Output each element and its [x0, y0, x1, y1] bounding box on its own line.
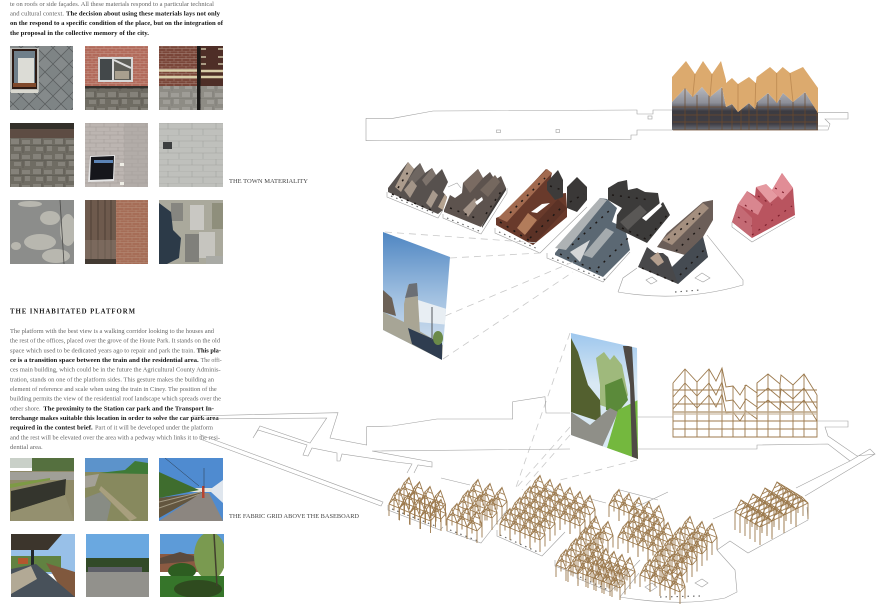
platform description text block: space which used to be dedicated years ago to repair and park the train. [10, 347, 195, 354]
platform description text block: building permits the view of the residential roof landscape which spreads over the [10, 396, 221, 403]
timber clad sawtooth roof [672, 61, 818, 113]
site outline: elevation strip [366, 110, 848, 141]
platform description text block: The proximity to the Station car park and the Transport In- [43, 405, 214, 412]
intro text block [10, 1, 224, 37]
timber frame block 4 [556, 516, 635, 600]
isometric coloured blocks [387, 162, 795, 296]
site outline: plan with platform [192, 397, 875, 602]
photo: station canopy and platform [11, 534, 75, 597]
block: dark front houses [638, 237, 708, 284]
timber frame block 1 [389, 478, 446, 533]
platform description text block: tration, stands on one of the platform sides. This gesture makes the building an [10, 376, 215, 383]
photo grid: platform site [10, 458, 226, 598]
block: blue-grey slate ring [555, 198, 630, 277]
photo: slate wall with window [10, 46, 73, 110]
timber frame block 2 [447, 480, 507, 543]
photo: lichen concrete [10, 200, 74, 264]
photo: station car park and train [86, 534, 149, 597]
photo: patched stone wall with shadow [159, 200, 223, 264]
heading: the inhabited platform: THE INHABITATED PLATFORM [10, 309, 136, 316]
photo: rough stone wall [10, 123, 74, 187]
plot baselines for the blocks [387, 183, 743, 296]
photo: brick wall with window [85, 46, 148, 110]
platform description text block: ce is a transition space between the train and the residential area. [10, 357, 199, 364]
photo: old retaining wall [10, 458, 74, 521]
photo: overgrown platform [85, 458, 148, 521]
block: dark grey houses [608, 180, 670, 243]
photo: green garden and houses [160, 534, 224, 597]
photo grid: town materials [10, 46, 223, 264]
photo: platform with tracks, blue sky [159, 458, 223, 521]
skewed photo: church tower [383, 232, 450, 360]
label: the town materiality: THE TOWN MATERIALITY [229, 178, 309, 185]
building elevation with timber roofs [672, 61, 818, 130]
skewed photo: river and trees [571, 333, 638, 459]
timber frame block 5 [609, 490, 673, 565]
platform description text block: terchange makes suitable this location in order to solve the car park area [10, 415, 219, 422]
photo: brick and stone with drainpipe [159, 46, 223, 110]
timber frame block 3 [500, 476, 595, 552]
intro text block: on the respond to a specific condition of the place, but on the integration of [10, 20, 224, 27]
block: small dark houses [547, 170, 587, 212]
block: grey and beige houses [388, 162, 448, 214]
photo: white painted brick wall [159, 123, 223, 187]
intro text block: te on roofs or side façades. All these materials respond to a particular technical [10, 1, 214, 8]
block: red model [732, 173, 795, 242]
platform description text block [10, 328, 222, 451]
block: beige-brown houses [657, 200, 713, 257]
photo: clad wall with dark window [85, 123, 148, 187]
platform description text block: dential area. [10, 444, 43, 451]
photo: timber door and brick [85, 200, 148, 264]
label: the fabric grid above the baseboard: THE FABRIC GRID ABOVE THE BASEBOARD [229, 513, 360, 520]
platform description text block: the rest of the offices, placed over the grove of the Houte Park. It stands on the old [10, 338, 221, 345]
elevation timber frame [673, 368, 817, 437]
intro text block: The decision about using these materials lays not only [66, 10, 221, 18]
timber elevation grid [672, 88, 818, 130]
dashed projection lines to river photo [515, 333, 637, 490]
intro text block: the proposal in the collective memory of the city. [10, 30, 149, 37]
platform description text block: required in the contest brief. [10, 425, 93, 432]
timber frame block 6 [640, 516, 717, 604]
platform description text block: The platform with the best view is a walking corridor looking to the houses and [10, 328, 215, 335]
platform description text block: ces main building, which could be in the future the Agricultural County Adminis- [10, 367, 221, 374]
platform description text block: and the rest will be elevated over the area with a pedway which links it to the resi- [10, 434, 220, 441]
timber frame block 7 [735, 482, 808, 545]
platform description text block: element of reference and scale when using the train in Ciney. The position of the [10, 386, 217, 393]
block: grey-brown houses [444, 169, 506, 228]
glazed storeys [672, 87, 818, 130]
intro text block: and cultural context. [10, 10, 64, 18]
platform description text block: The offi- [201, 357, 222, 364]
platform description text block: Part of it will be developed under the platform [95, 425, 214, 432]
dashed projection lines to tower photo [385, 232, 573, 359]
platform description text block: other shore. [10, 405, 41, 412]
block: brown brick ring [496, 169, 567, 245]
platform description text block: This pla- [197, 347, 221, 354]
